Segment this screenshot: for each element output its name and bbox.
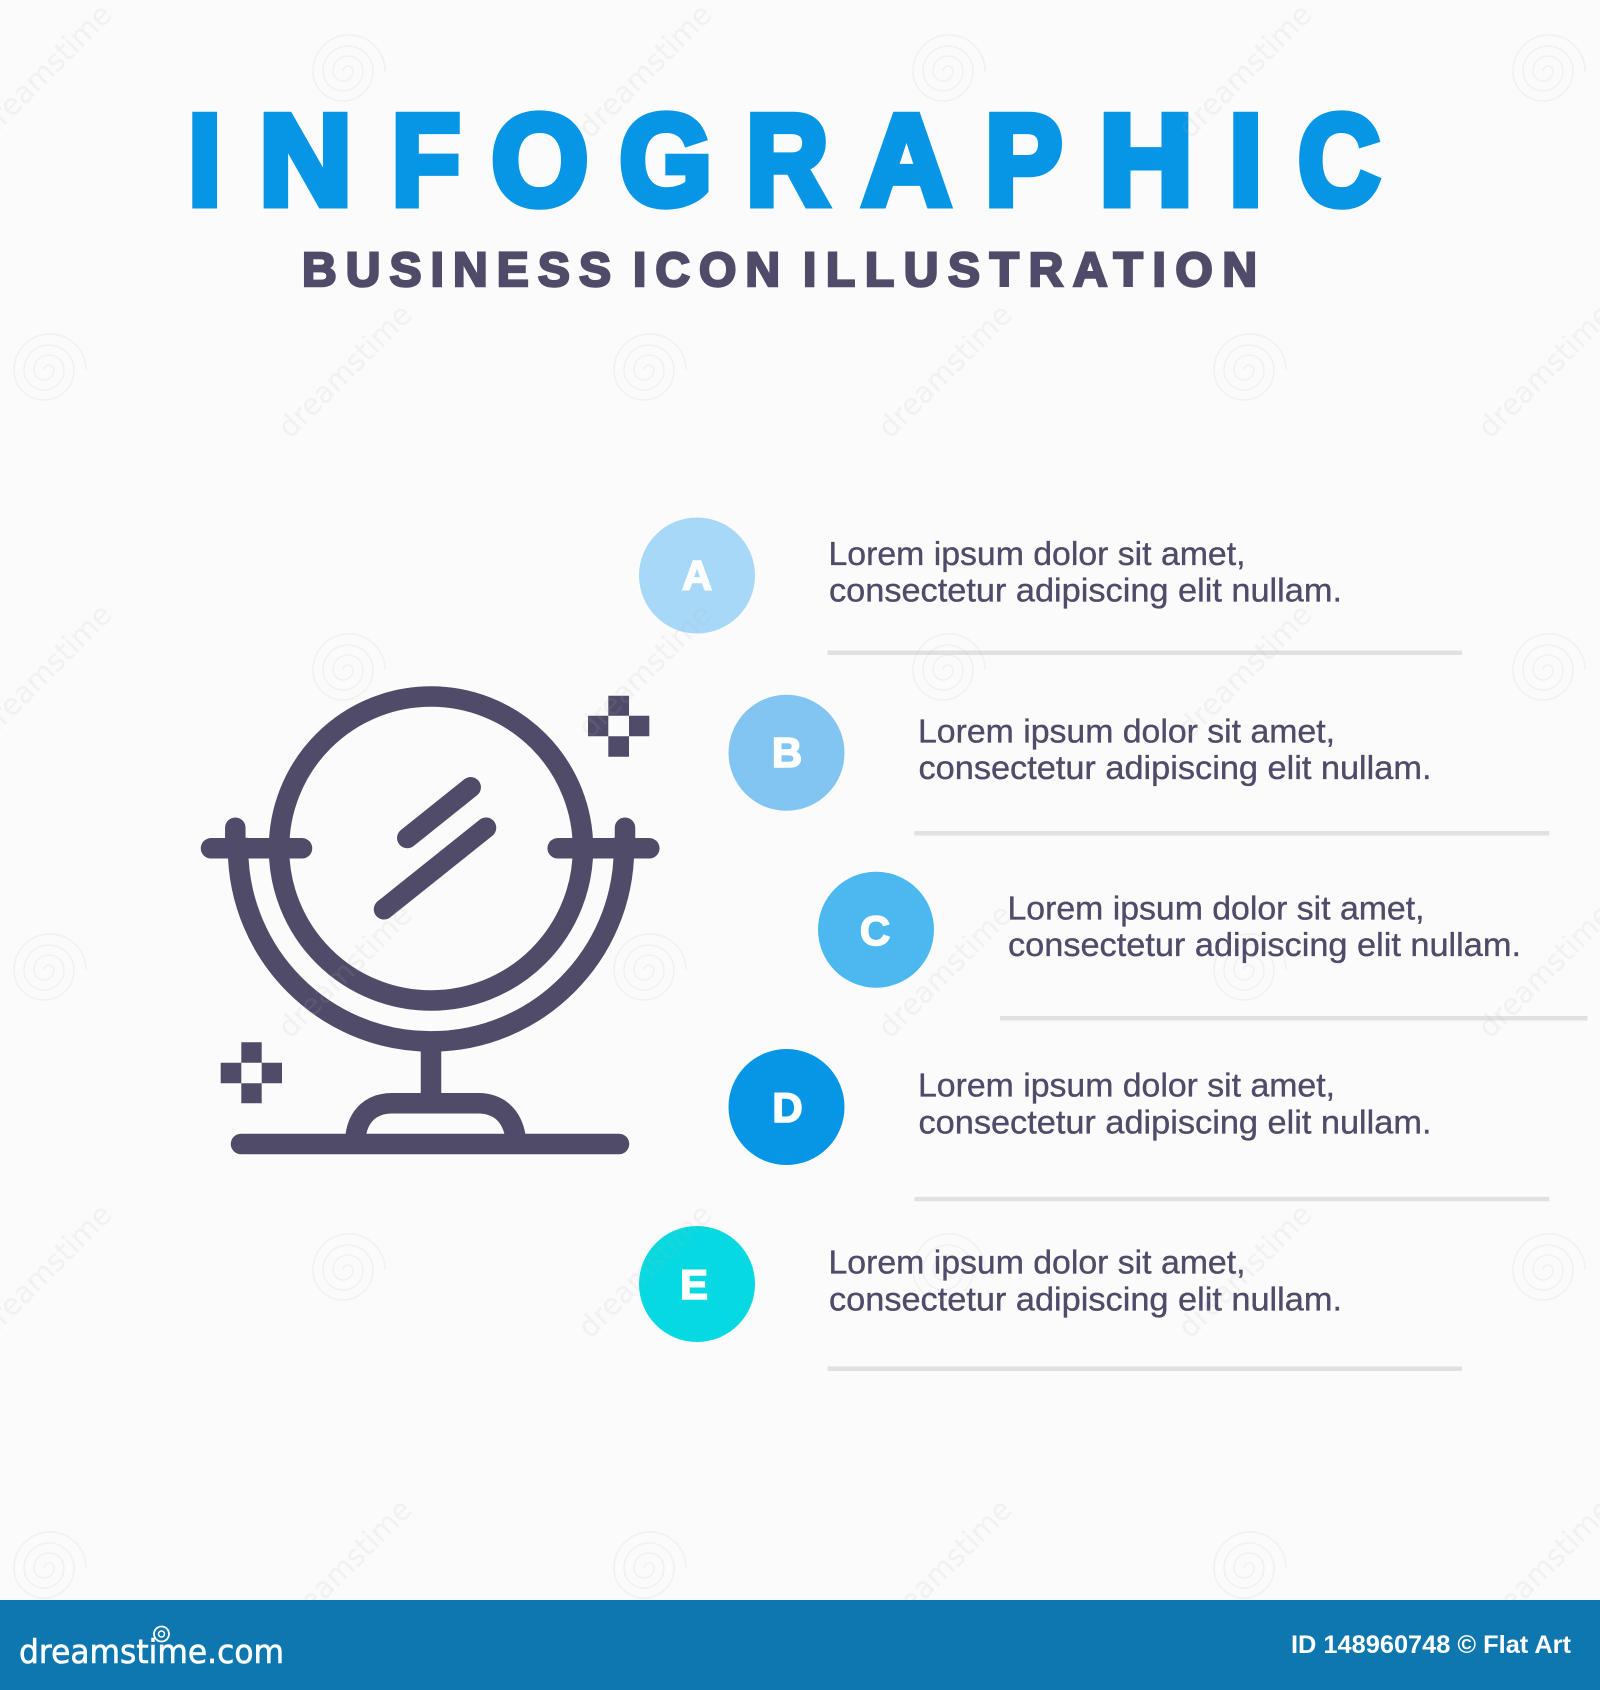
- icon: sparkle right: [588, 696, 649, 757]
- title: [188, 87, 1380, 233]
- ground line: [241, 1134, 619, 1154]
- footer bar: [0, 1600, 1600, 1690]
- text C: Lorem ipsum dolor sit amet,: [1008, 889, 1424, 926]
- badge E: [639, 1226, 755, 1342]
- text E: [828, 1244, 1342, 1317]
- title: I: [188, 89, 221, 232]
- badge A: A: [682, 552, 712, 599]
- text: dreamstime: [1171, 597, 1319, 745]
- badge E: E: [680, 1261, 708, 1308]
- item D: [728, 1049, 1549, 1201]
- text A: Lorem ipsum dolor sit amet,: [828, 535, 1246, 572]
- title: I: [1229, 89, 1262, 232]
- text: dreamstime: [871, 897, 1019, 1045]
- title: H: [1099, 89, 1193, 232]
- badge C: C: [860, 907, 890, 954]
- title: R: [746, 88, 829, 232]
- text A: [828, 535, 1342, 609]
- text: dreamstime: [871, 1492, 1019, 1640]
- text: dreamstime: [571, 0, 719, 145]
- stand stem: [421, 1042, 441, 1100]
- text: dreamstime: [571, 597, 719, 745]
- text B: Lorem ipsum dolor sit amet,: [918, 712, 1335, 750]
- mirror glints: [384, 787, 486, 909]
- mirror frame: [279, 696, 583, 1000]
- text D: consectetur adipiscing elit nullam.: [918, 1103, 1432, 1140]
- text: dreamstime: [1171, 0, 1319, 145]
- title: P: [985, 89, 1062, 233]
- footer logo: dreamstime.com: [19, 1632, 284, 1671]
- badge B: [728, 695, 844, 811]
- item E: [639, 1226, 1462, 1371]
- item B: [728, 695, 1549, 836]
- text B: consectetur adipiscing elit nullam.: [918, 749, 1432, 786]
- icon: table mirror: [211, 696, 649, 1144]
- title: O: [491, 88, 588, 232]
- badge A: [639, 518, 755, 634]
- title: N: [259, 88, 352, 232]
- mirror holder: [235, 828, 625, 1041]
- side pivots: [211, 838, 649, 859]
- text A: consectetur adipiscing elit nullam.: [829, 572, 1342, 609]
- subtitle: [302, 244, 1257, 297]
- title: C: [1298, 88, 1380, 232]
- title: G: [619, 89, 712, 233]
- text B: [918, 712, 1432, 786]
- badge C: [818, 872, 934, 988]
- title: A: [862, 88, 951, 232]
- subtitle: BUSINESS: [302, 244, 611, 297]
- text: dreamstime: [271, 897, 419, 1045]
- text D: Lorem ipsum dolor sit amet,: [918, 1067, 1335, 1104]
- text: dreamstime: [571, 1197, 719, 1345]
- badge D: [728, 1049, 844, 1165]
- text: dreamstime: [271, 1492, 419, 1640]
- subtitle: ILLUSTRATION: [803, 244, 1257, 297]
- text: dreamstime: [871, 297, 1019, 445]
- text E: consectetur adipiscing elit nullam.: [829, 1280, 1342, 1317]
- icon: sparkle left: [221, 1042, 282, 1103]
- text E: Lorem ipsum dolor sit amet,: [828, 1244, 1246, 1281]
- item C: [818, 872, 1588, 1020]
- footer credit: ID 148960748 © Flat Art: [1291, 1631, 1572, 1659]
- item A: [639, 518, 1462, 655]
- text D: [918, 1067, 1432, 1140]
- stand base: [356, 1103, 516, 1137]
- badge B: B: [772, 729, 802, 776]
- badge D: D: [772, 1084, 803, 1131]
- text C: [1008, 889, 1521, 963]
- subtitle: ICON: [633, 244, 780, 297]
- text C: consectetur adipiscing elit nullam.: [1008, 926, 1521, 963]
- text: dreamstime: [271, 297, 419, 445]
- title: F: [392, 87, 460, 232]
- text: dreamstime: [1171, 1197, 1319, 1345]
